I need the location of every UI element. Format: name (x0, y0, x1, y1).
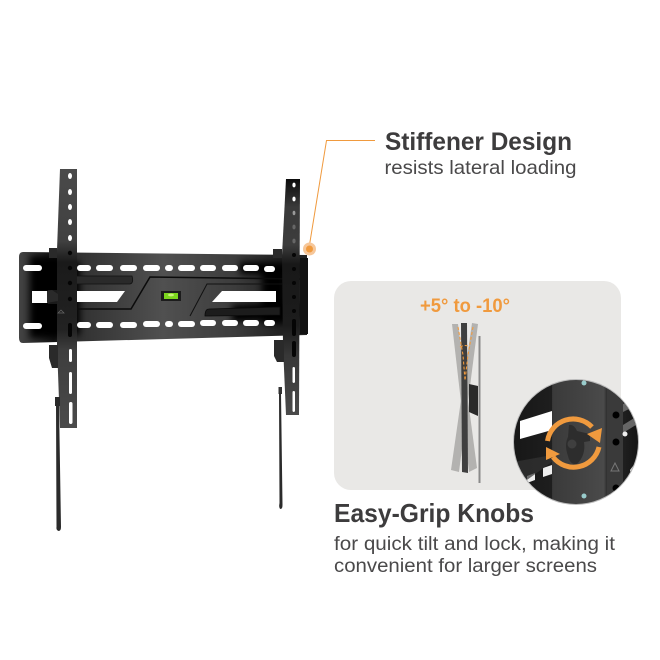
tilt angle marks (458, 327, 473, 380)
text: knob description: for quick tilt and lock, making it (334, 534, 616, 555)
mounting plate (19, 252, 308, 343)
text: resists lateral loading: resists lateral loading (384, 157, 576, 179)
wall mount product (19, 169, 308, 531)
text: knob description: convenient for larger screens (334, 556, 597, 577)
callout: stiffener leader line (303, 140, 375, 256)
spirit level (161, 291, 181, 301)
right safety strap (278, 387, 282, 509)
heading: stiffener design: Stiffener Design (385, 128, 572, 156)
knob (566, 425, 590, 464)
stiffener ribs (77, 276, 133, 284)
left bracket (47, 169, 77, 428)
right bracket (273, 179, 300, 415)
inset: knob close-up (513, 379, 639, 505)
panel: tilt range (334, 281, 621, 490)
rotate arrows (548, 419, 599, 467)
centre openings (77, 291, 125, 302)
label: tilt angle: +5° to -10° (420, 296, 510, 317)
knob (47, 290, 58, 303)
left safety strap (55, 397, 61, 531)
heading: easy-grip knobs: Easy-Grip Knobs (334, 498, 534, 528)
upper slots (23, 265, 275, 272)
lower slots (23, 320, 275, 329)
tilt side diagram (451, 323, 480, 483)
